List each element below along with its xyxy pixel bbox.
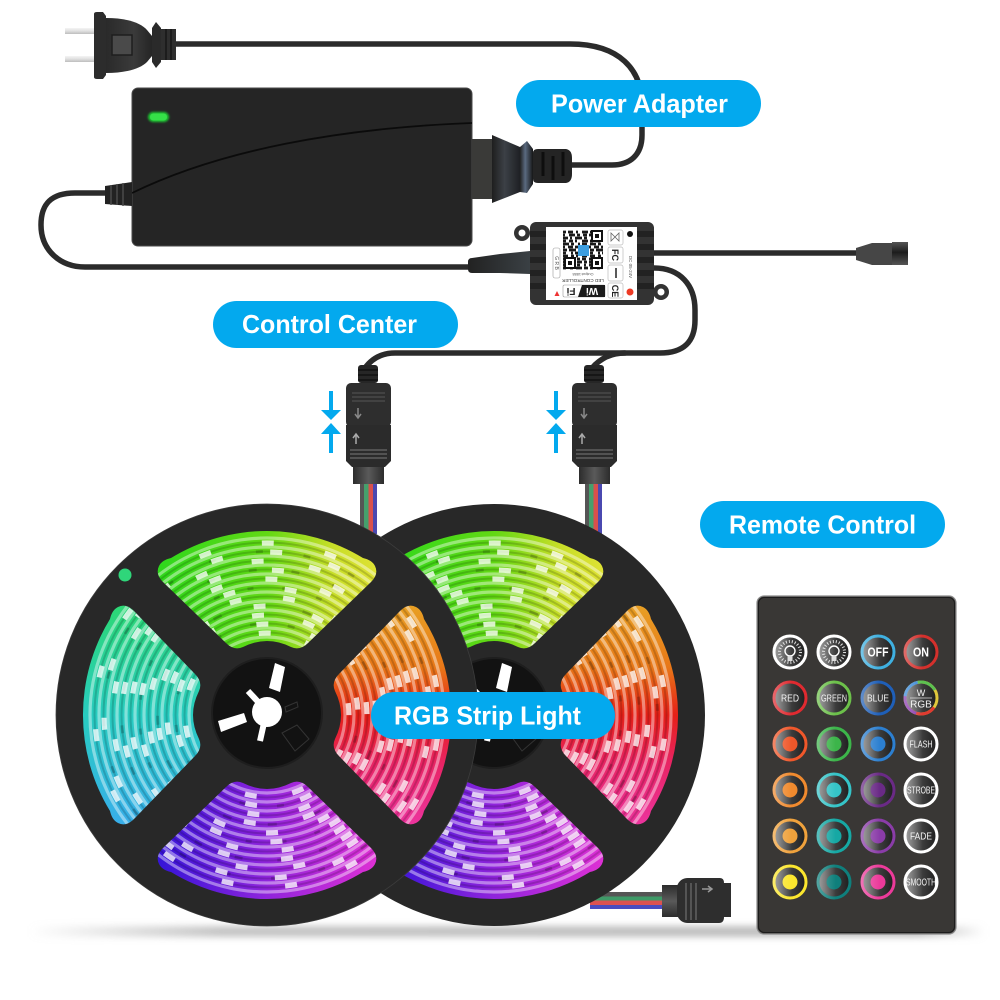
right reel: bottom purple segment: [404, 782, 604, 899]
button: colour row 5: [772, 818, 896, 854]
connector: left plug pair: [346, 365, 391, 484]
button: OFF: OFF: [868, 644, 889, 660]
button: FADE: [904, 818, 938, 854]
button: STROBE: STROBE: [907, 784, 935, 796]
button: W/RGB: RGB: [910, 700, 932, 710]
button: RED: RED: [781, 692, 799, 704]
arrows: left connect indicator: [321, 391, 341, 453]
button: GREEN: GREEN: [821, 692, 847, 704]
panel: wifi controller: Fi: [566, 285, 575, 296]
button: colour row 6: [772, 864, 896, 900]
left reel: hub: [212, 658, 322, 768]
left reel: left green-cyan-blue segment: [83, 606, 200, 824]
button: OFF: [860, 634, 896, 670]
panel: power adapter: [105, 88, 472, 246]
output female connector: [856, 242, 908, 265]
left reel: bottom blue-purple segment: [158, 782, 376, 899]
cable: adapter to controller: [41, 193, 470, 267]
button: W/RGB: [904, 680, 938, 716]
panel: remote control: [757, 596, 956, 934]
ground shadow: [30, 926, 985, 937]
button: W/RGB: W: [917, 688, 926, 698]
button: FLASH: [904, 726, 938, 762]
arrows: right connect indicator: [546, 391, 566, 453]
cable: controller output: [654, 250, 860, 256]
label: Power Adapter: Power Adapter: [551, 89, 728, 119]
left reel: green dot: [118, 568, 132, 582]
button: BLUE: BLUE: [867, 692, 889, 704]
panel: wifi controller: Output:1888: [573, 272, 593, 276]
button: RED: [772, 680, 808, 716]
left reel: top green-yellow segment: [158, 531, 376, 648]
label: Control Center: Control Center: [242, 309, 417, 339]
right reel: right red segment: [560, 606, 678, 824]
button: FADE: FADE: [910, 830, 932, 842]
wires: bottom strip lead: [590, 892, 662, 909]
panel: wifi controller: CE: [610, 285, 620, 297]
button: colour row 3: [772, 726, 896, 762]
panel: wifi controller: DC 05-24V: [628, 256, 633, 278]
button: STROBE: [904, 772, 938, 808]
button: colour row 4: [772, 772, 896, 808]
button: BLUE: [860, 680, 896, 716]
button: SMOOTH: [904, 864, 938, 900]
wires: left connector: [360, 484, 377, 534]
QR code: [563, 231, 603, 268]
panel: left reel: [56, 504, 478, 926]
cable: branch to right connector: [592, 353, 625, 368]
panel: wifi controller: G R B: [553, 256, 559, 270]
button: ON: ON: [913, 644, 929, 660]
button: GREEN: [816, 680, 852, 716]
cable: controller to connectors: [365, 268, 695, 368]
panel: wifi controller: [468, 222, 669, 305]
connector: bottom strip lead: [662, 878, 731, 923]
button: ON: [904, 634, 938, 670]
cable: mains plug to adapter: [175, 44, 642, 165]
label: Power Adapter: [516, 80, 761, 127]
button: SMOOTH: SMOOTH: [906, 876, 936, 888]
label: Control Center: [213, 301, 458, 348]
panel: right reel: [380, 504, 705, 926]
left reel: right orange-red-pink segment: [334, 606, 450, 824]
right reel: top green segment: [404, 531, 604, 648]
panel: wifi controller: Wi: [586, 285, 598, 296]
wires: right connector: [585, 484, 602, 534]
button: bulb dim: [772, 634, 808, 670]
button: FLASH: FLASH: [910, 738, 932, 750]
adapter output connector: [472, 135, 572, 203]
right reel: hub: [439, 658, 549, 768]
button: bulb bright: [816, 634, 852, 670]
connector: right plug pair: [572, 365, 617, 484]
label: Remote Control: Remote Control: [729, 510, 916, 540]
label: Remote Control: [700, 501, 945, 548]
icon: mains plug: [65, 12, 176, 79]
panel: wifi controller: FC: [610, 249, 620, 261]
label: RGB Strip Light: [371, 692, 615, 739]
panel: wifi controller: LED CONTROLLER: [562, 278, 604, 283]
label: RGB Strip Light: RGB Strip Light: [394, 701, 581, 731]
